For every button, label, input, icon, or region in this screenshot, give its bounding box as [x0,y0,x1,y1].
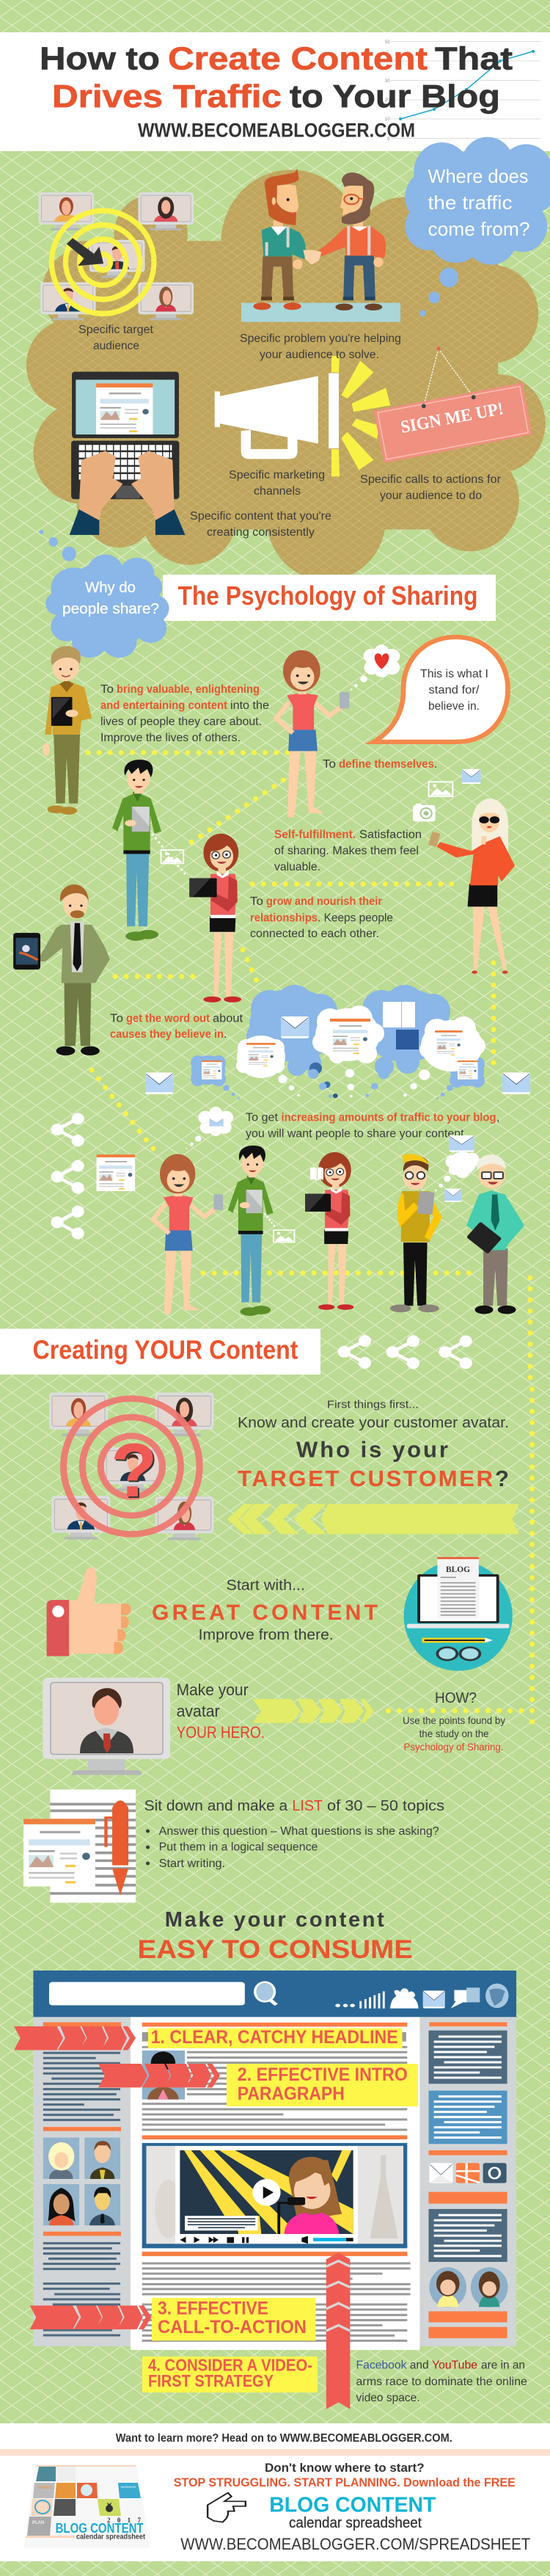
text: self-fulfillment: valuable. [274,861,320,873]
heading: make your content easy to consume: Make your content [165,1908,384,1932]
icon: pointing hand [208,2493,246,2522]
text: grow and nourish: grow and nourish their [266,895,382,908]
text: how: the study on the [419,1728,489,1739]
text: make a list: Answer this question – What questions is she asking? [159,1825,439,1838]
image: blog content calendar book: THEMES [37,2486,53,2490]
icon: list with pen and page [23,1789,136,1903]
line chart behind title: 10 [385,117,390,122]
text: increasing traffic: To get [246,1111,279,1124]
labels on the brown cloud: Specific problem you're helping [240,332,401,345]
text: make a list: LIST [292,1798,323,1814]
icons: three share symbols and page [51,1113,135,1240]
text: download call to action: Don't know where to start? [265,2461,425,2475]
text: bring valuable content: bring valuable, enlightening [117,683,260,696]
cloud: where does the traffic come from: the traffic [428,192,512,214]
icon: open book [310,1167,323,1181]
person: man in yellow beanie [390,1154,442,1312]
text: get the word out [110,1013,243,1041]
text: facebook and youtube: and [410,2359,429,2372]
labels on the brown cloud [78,324,501,539]
image: blog content calendar book [23,2464,150,2548]
text: facebook and youtube: Facebook [356,2359,407,2372]
text: grow and nourish: To [250,895,263,908]
header band [0,32,550,151]
icon: avatar on monitor [43,1678,170,1775]
labels on the brown cloud: Specific marketing [229,469,325,481]
speech bubble: this is what I stand for: stand for/ [428,684,480,696]
text: self-fulfillment: Satisfaction [359,829,422,841]
text: make a list [144,1798,444,1870]
thought bubble and envelopes near yellow man [435,1135,480,1202]
text: get the word out: about [213,1013,243,1025]
sign: sign me up: SIGN ME UP! [399,399,505,437]
text: bring valuable content: To [100,683,114,696]
cloud: where does the traffic come from: Where does [428,165,528,187]
person: woman with glasses, row [305,1152,353,1310]
callout 2: effective intro paragraph: 2. EFFECTIVE INTRO [238,2064,408,2085]
panel: blog page mockup [33,1971,516,2350]
text: make your avatar your hero: Make your [177,1681,249,1699]
callout 2: effective intro paragraph: PARAGRAPH [238,2084,345,2104]
heading band: the psychology of sharing: The Psychology of Sharing [177,581,478,611]
text: target customer: Know and create your customer avatar. [238,1415,509,1431]
icon: thumbs up [47,1567,131,1656]
browser header bar with icons [33,1971,516,2017]
text: download call to action: calendar spreadsheet [289,2515,422,2531]
text: increasing traffic [246,1111,499,1140]
cloud: where does the traffic come from: come from? [428,218,529,240]
footer band: want to learn more: Want to learn more? Head on to WWW.BECOMEABLOGGER.COM. [116,2432,452,2445]
text: increasing traffic: you will want people to share your content. [246,1127,467,1140]
text: target customer [238,1399,509,1491]
cloud: why do people share: people share? [62,601,159,617]
text: target customer: First things first... [327,1399,419,1411]
callout 3: effective call-to-action: CALL-TO-ACTION [158,2317,307,2337]
icon: shared image [153,834,188,877]
center column content [142,2025,407,2254]
title: How to [40,41,160,76]
arrow: yellow left chevrons [227,1504,519,1534]
text: how: Psychology of Sharing. [403,1741,503,1753]
text: how [403,1690,505,1753]
cluster: clouds of shared content [145,985,530,1099]
text: grow and nourish: . Keeps people [318,912,393,925]
arrow: vertical red chevrons [326,2252,350,2409]
labels on the brown cloud: your audience to do [380,490,482,502]
labels on the brown cloud: creating consistently [207,526,315,539]
right column content, lower [428,2246,508,2338]
footer band: want to learn more [0,2423,550,2449]
text: grow and nourish: connected to each other. [250,928,379,940]
arrow: yellow right chevrons [252,1699,373,1723]
labels on the brown cloud: Specific target [78,324,154,336]
text: target customer: Who is your [296,1437,448,1462]
text: great content: GREAT CONTENT [152,1601,378,1625]
image: blog content calendar book: BLOG CONTENT [56,2521,144,2536]
text: make a list: Start writing. [159,1858,225,1870]
callout 4: video-first strategy: 4. CONSIDER A VIDEO- [148,2356,312,2375]
title: Drives Traffic [52,79,282,114]
text: bring valuable content: into the [230,699,269,712]
text: how: HOW? [435,1690,477,1706]
text: bring valuable content: lives of people they care about. [100,716,262,728]
text: great content: Improve from there. [199,1627,334,1643]
line chart behind title: 50 [385,40,390,45]
cloud: where does the traffic come from [405,137,550,316]
left column content, lower [43,2249,120,2335]
callout 1: clear, catchy headline: 1. CLEAR, CATCHY HEADLINE [151,2027,398,2048]
person: older man in teal shirt [466,1154,524,1314]
icons: share symbols row [338,1335,472,1369]
person: woman in red shirt with phone [276,650,349,818]
heading: make your content easy to consume [138,1908,413,1964]
title: Create Content [168,41,428,76]
callout 3: effective call-to-action: 3. EFFECTIVE [158,2298,268,2318]
labels on the brown cloud: your audience to solve. [260,349,379,361]
text: facebook and youtube: YouTube [432,2359,477,2372]
text: target customer: TARGET CUSTOMER [238,1466,493,1491]
image: blog content calendar book: BUSINESS [121,2485,136,2489]
illustration: two men shaking hands [241,169,400,322]
icon: blog badge with laptop, pencil and glasses: BLOG [446,1564,470,1574]
page columns [33,2017,516,2350]
icons: envelope, image and camera [413,769,481,821]
text: make your avatar your hero: YOUR HERO. [177,1723,265,1742]
person: green shirt man with tablet [112,760,161,941]
title: That [435,41,513,76]
icon: blog badge with laptop, pencil and glasses [404,1557,513,1671]
callout 4: video-first strategy [142,2356,318,2393]
text: self-fulfillment [274,829,422,873]
text: get the word out: To [110,1013,123,1025]
icon: laptop with hands [70,371,186,535]
speech bubble: this is what I stand for [373,637,508,742]
text: bring valuable content [100,683,269,744]
title [40,41,513,114]
website url: WWW.BECOMEABLOGGER.COM [138,119,415,141]
person: woman in red, row [153,1154,223,1314]
left column content [43,2024,121,2259]
icon: image and dotted trail [265,1214,294,1242]
labels on the brown cloud: Specific content that you're [190,510,331,523]
text: download call to action: WWW.BECOMEABLOGGER.COM/SPREADSHEET [180,2535,530,2553]
text: define themselves: . [434,758,437,771]
heading band: creating your content: Creating YOUR Content [32,1334,298,1365]
text: make a list: Put them in a logical sequence [159,1841,318,1854]
text: facebook and youtube: are in an [481,2359,525,2372]
text: target customer: ? [495,1466,509,1491]
text: make a list: Sit down and make a [144,1798,288,1814]
labels on the brown cloud: audience [93,340,139,352]
text: great content [152,1578,378,1643]
cloud: why do people share: Why do [85,580,136,596]
text: make a list: of 30 – 50 topics [327,1798,444,1814]
callout 3: effective call-to-action [30,2298,315,2340]
labels on the brown cloud: Specific calls to actions for [360,473,501,486]
line chart behind title [385,40,540,142]
text: great content: Start with... [226,1578,305,1594]
person: man in green, row [228,1146,274,1316]
callout 1: clear, catchy headline [14,2026,403,2050]
text: grow and nourish: relationships [250,912,318,925]
text: bring valuable content: Improve the lives of others. [100,732,241,744]
text: define themselves: define themselves [339,758,434,771]
line chart behind title: 20 [385,98,390,103]
text: facebook and youtube: arms race to dominate the online [356,2376,527,2388]
center column content, lower [142,2244,411,2340]
text: download call to action [174,2461,530,2553]
labels on the brown cloud: channels [254,485,301,498]
dotted connector lines [88,753,532,1722]
icon: target customer monitors: ? [111,1428,158,1513]
text: define themselves: To [323,758,336,771]
speech bubble: this is what I stand for: This is what I [420,668,488,680]
line chart behind title: 0 [387,137,390,142]
icon: target customer monitors: ? [112,1430,159,1515]
person: curly haired man with tablet [43,646,92,815]
text: increasing traffic: , [496,1111,499,1124]
thought bubble with envelope [186,1107,233,1149]
text: make your avatar your hero [177,1681,265,1742]
brown cloud panel [26,170,546,581]
text: get the word out: causes they believe in [110,1028,224,1041]
callout 2: effective intro paragraph [98,2064,418,2106]
footer: peach divider and white panel [0,2449,550,2561]
text: facebook and youtube [356,2359,527,2404]
right column content [428,2024,507,2260]
title: to Your Blog [290,79,500,114]
image: blog content calendar book: PLAN [32,2521,44,2525]
text: download call to action: STOP STRUGGLING. START PLANNING. Download the FREE [174,2475,516,2489]
speech bubble: this is what I stand for: believe in. [428,700,480,713]
text: how: Use the points found by [403,1714,505,1726]
text: increasing traffic: increasing amounts of traffic to your blog [282,1111,496,1124]
heading: make your content easy to consume: EASY TO CONSUME [138,1935,413,1964]
heading band: the psychology of sharing [163,575,496,621]
text: bring valuable content: and entertaining content [100,699,227,712]
icon: target customer monitors [49,1393,214,1540]
text: get the word out: get the word out [126,1013,210,1025]
cloud: why do people share [40,530,169,658]
line chart behind title: 30 [385,79,390,84]
text: make your avatar your hero: avatar [177,1702,220,1720]
callout 4: video-first strategy: FIRST STRATEGY [148,2371,274,2390]
text: facebook and youtube: video space. [356,2392,419,2404]
text: self-fulfillment: Self-fulfillment. [274,829,356,841]
icon: heart thought bubble [351,644,400,691]
person: man in olive suit with tablet [13,884,110,1055]
image: blog content calendar book: 2017 [107,2517,141,2524]
text: self-fulfillment: of sharing. Makes them feel [274,845,419,857]
heading band: creating your content [0,1328,320,1375]
text: grow and nourish [250,895,393,940]
image: blog content calendar book: calendar spreadsheet [76,2533,146,2541]
person: woman with glasses and tablet [189,834,241,1003]
text: download call to action: BLOG CONTENT [269,2494,436,2517]
sign: sign me up [373,347,532,463]
text: get the word out: . [224,1028,227,1041]
icon: megaphone [215,356,390,476]
icon: target audience monitors [39,192,194,320]
person: blonde woman with sunglasses [428,798,515,974]
